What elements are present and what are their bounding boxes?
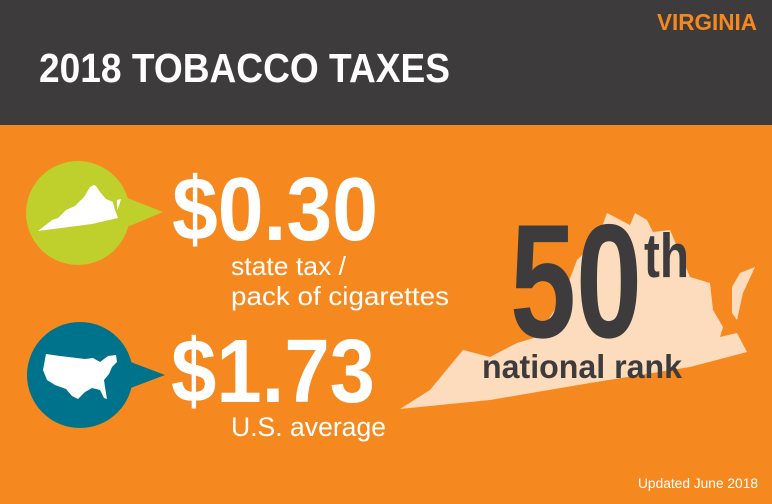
rank number: 50 [510, 191, 642, 372]
tax value: $0.30 [172, 160, 378, 260]
tax value: pack of cigarettes [231, 281, 449, 311]
icon: US bubble [27, 322, 165, 428]
US average value: $1.73 [171, 322, 375, 422]
footer note: Updated June 2018 [638, 475, 758, 491]
rank number: th [644, 222, 689, 291]
tax value: state tax / [231, 251, 347, 281]
state label: VIRGINIA [657, 9, 757, 35]
rank number: national rank [482, 348, 683, 385]
large Virginia map [400, 213, 755, 409]
icon: Virginia bubble [26, 161, 163, 265]
US average value: U.S. average [231, 412, 386, 442]
title: 2018 TOBACCO TAXES [39, 45, 450, 91]
tax value [172, 160, 449, 311]
header bar [0, 0, 772, 125]
